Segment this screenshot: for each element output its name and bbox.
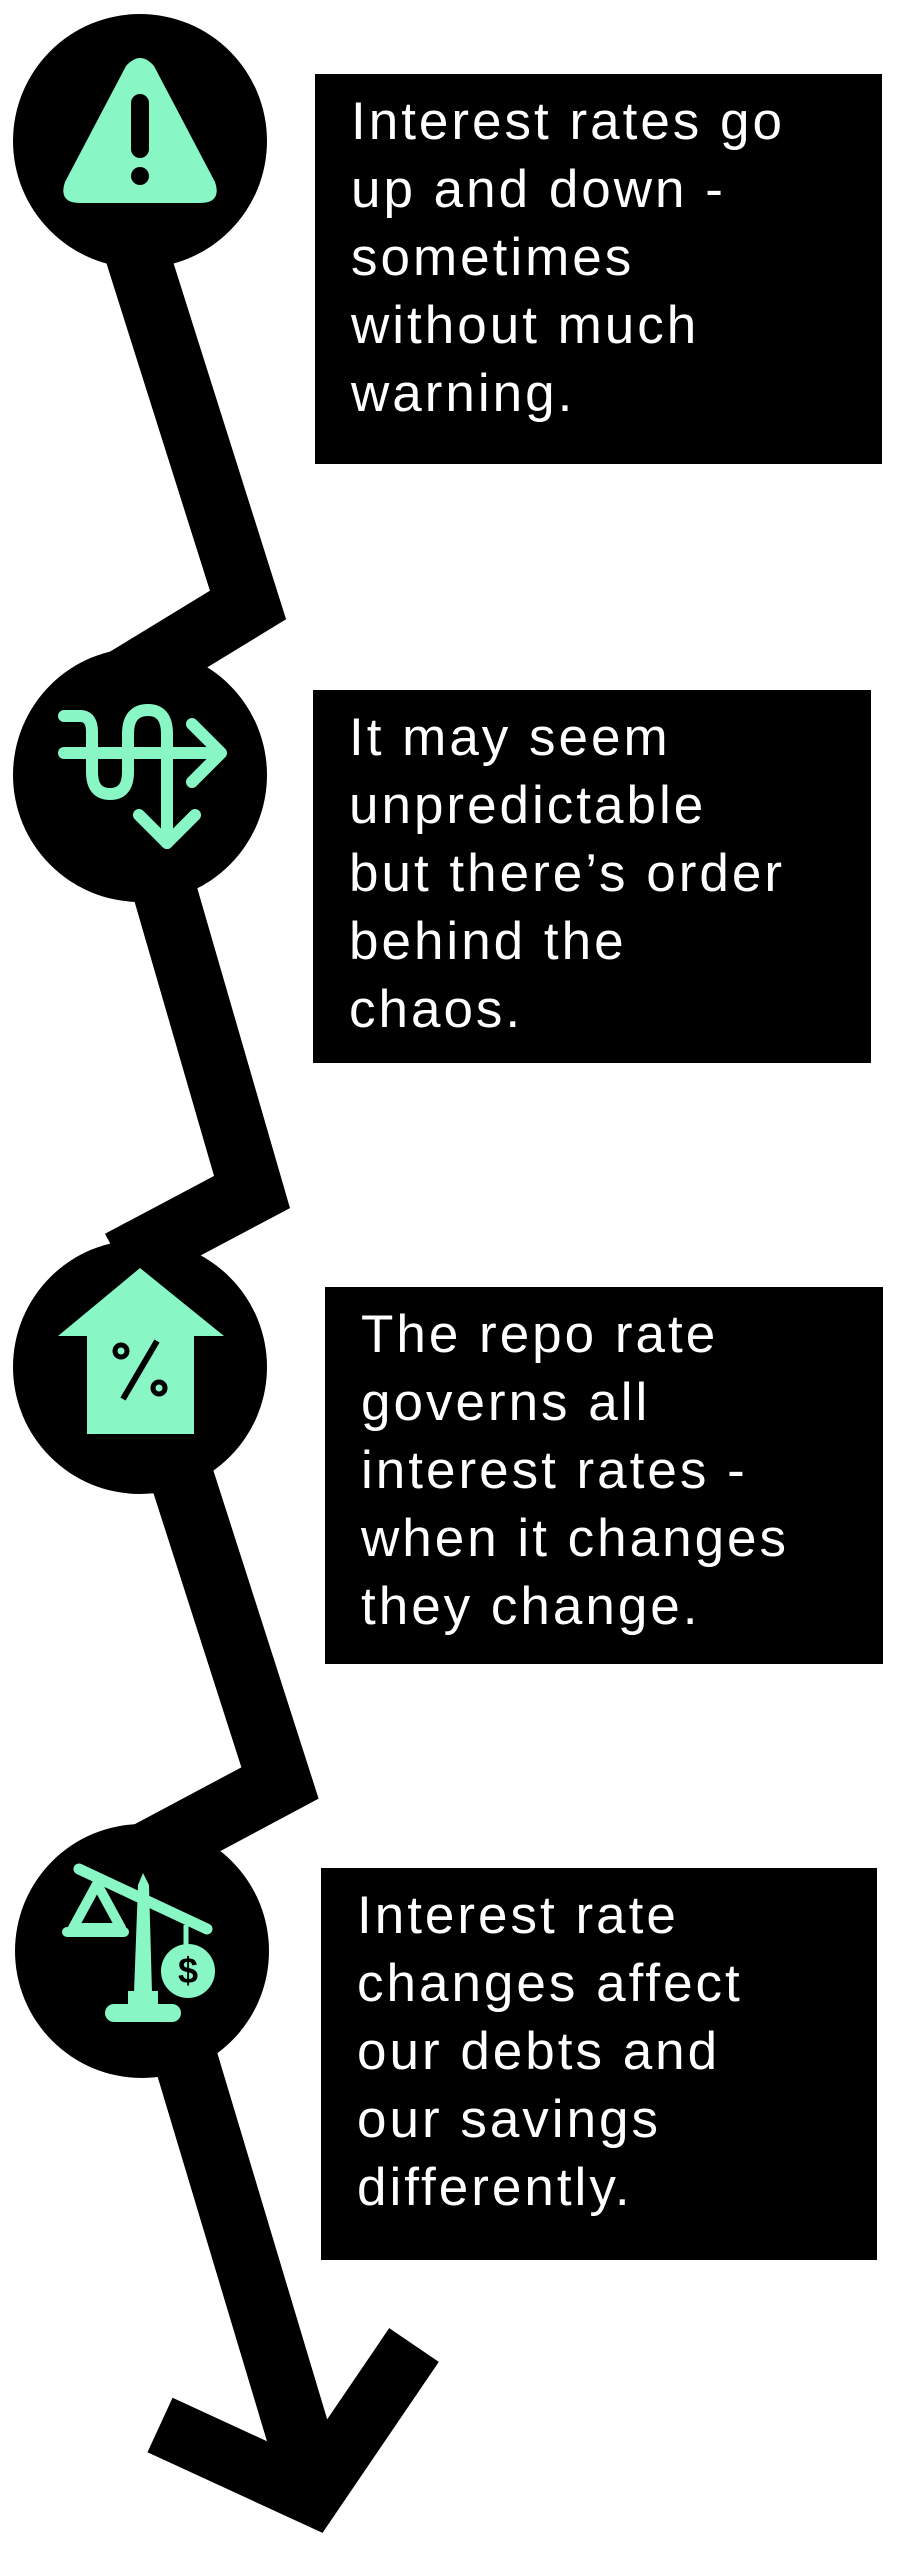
text box 3: when it changes <box>361 1509 789 1568</box>
text box 4: Interest rate <box>357 1886 679 1945</box>
text box 3 <box>325 1287 883 1664</box>
text box 4: our debts and <box>357 2022 720 2081</box>
circle 1: warning icon <box>13 14 267 268</box>
text box 1: warning. <box>351 364 575 423</box>
text box 1: sometimes <box>351 228 634 287</box>
text box 2 <box>313 690 871 1063</box>
text box 4: our savings <box>357 2090 661 2149</box>
text box 2: unpredictable <box>349 776 706 835</box>
text box 2: behind the <box>349 912 627 971</box>
text box 3: governs all <box>361 1373 650 1432</box>
text box 1: up and down - <box>351 160 726 219</box>
circle 4: scales with dollar icon <box>15 1824 269 2078</box>
text box 3: they change. <box>361 1577 701 1636</box>
circle 4: scales with dollar icon: $ <box>178 1950 198 1991</box>
text box 4: differently. <box>357 2158 633 2217</box>
text box 1: without much <box>351 296 699 355</box>
circle 3: house percent icon <box>13 1240 267 1494</box>
text box 1: Interest rates go <box>351 92 785 151</box>
text box 2: chaos. <box>349 980 523 1039</box>
arrowhead <box>160 2345 414 2495</box>
text box 4 <box>321 1868 877 2260</box>
text box 2: It may seem <box>349 708 671 767</box>
text box 4: changes affect <box>357 1954 743 2013</box>
circle 2: wavy arrows icon <box>13 648 267 902</box>
text box 1 <box>315 74 882 464</box>
text box 3: interest rates - <box>361 1441 748 1500</box>
text box 2: but there’s order <box>349 844 785 903</box>
text box 3: The repo rate <box>361 1305 718 1364</box>
